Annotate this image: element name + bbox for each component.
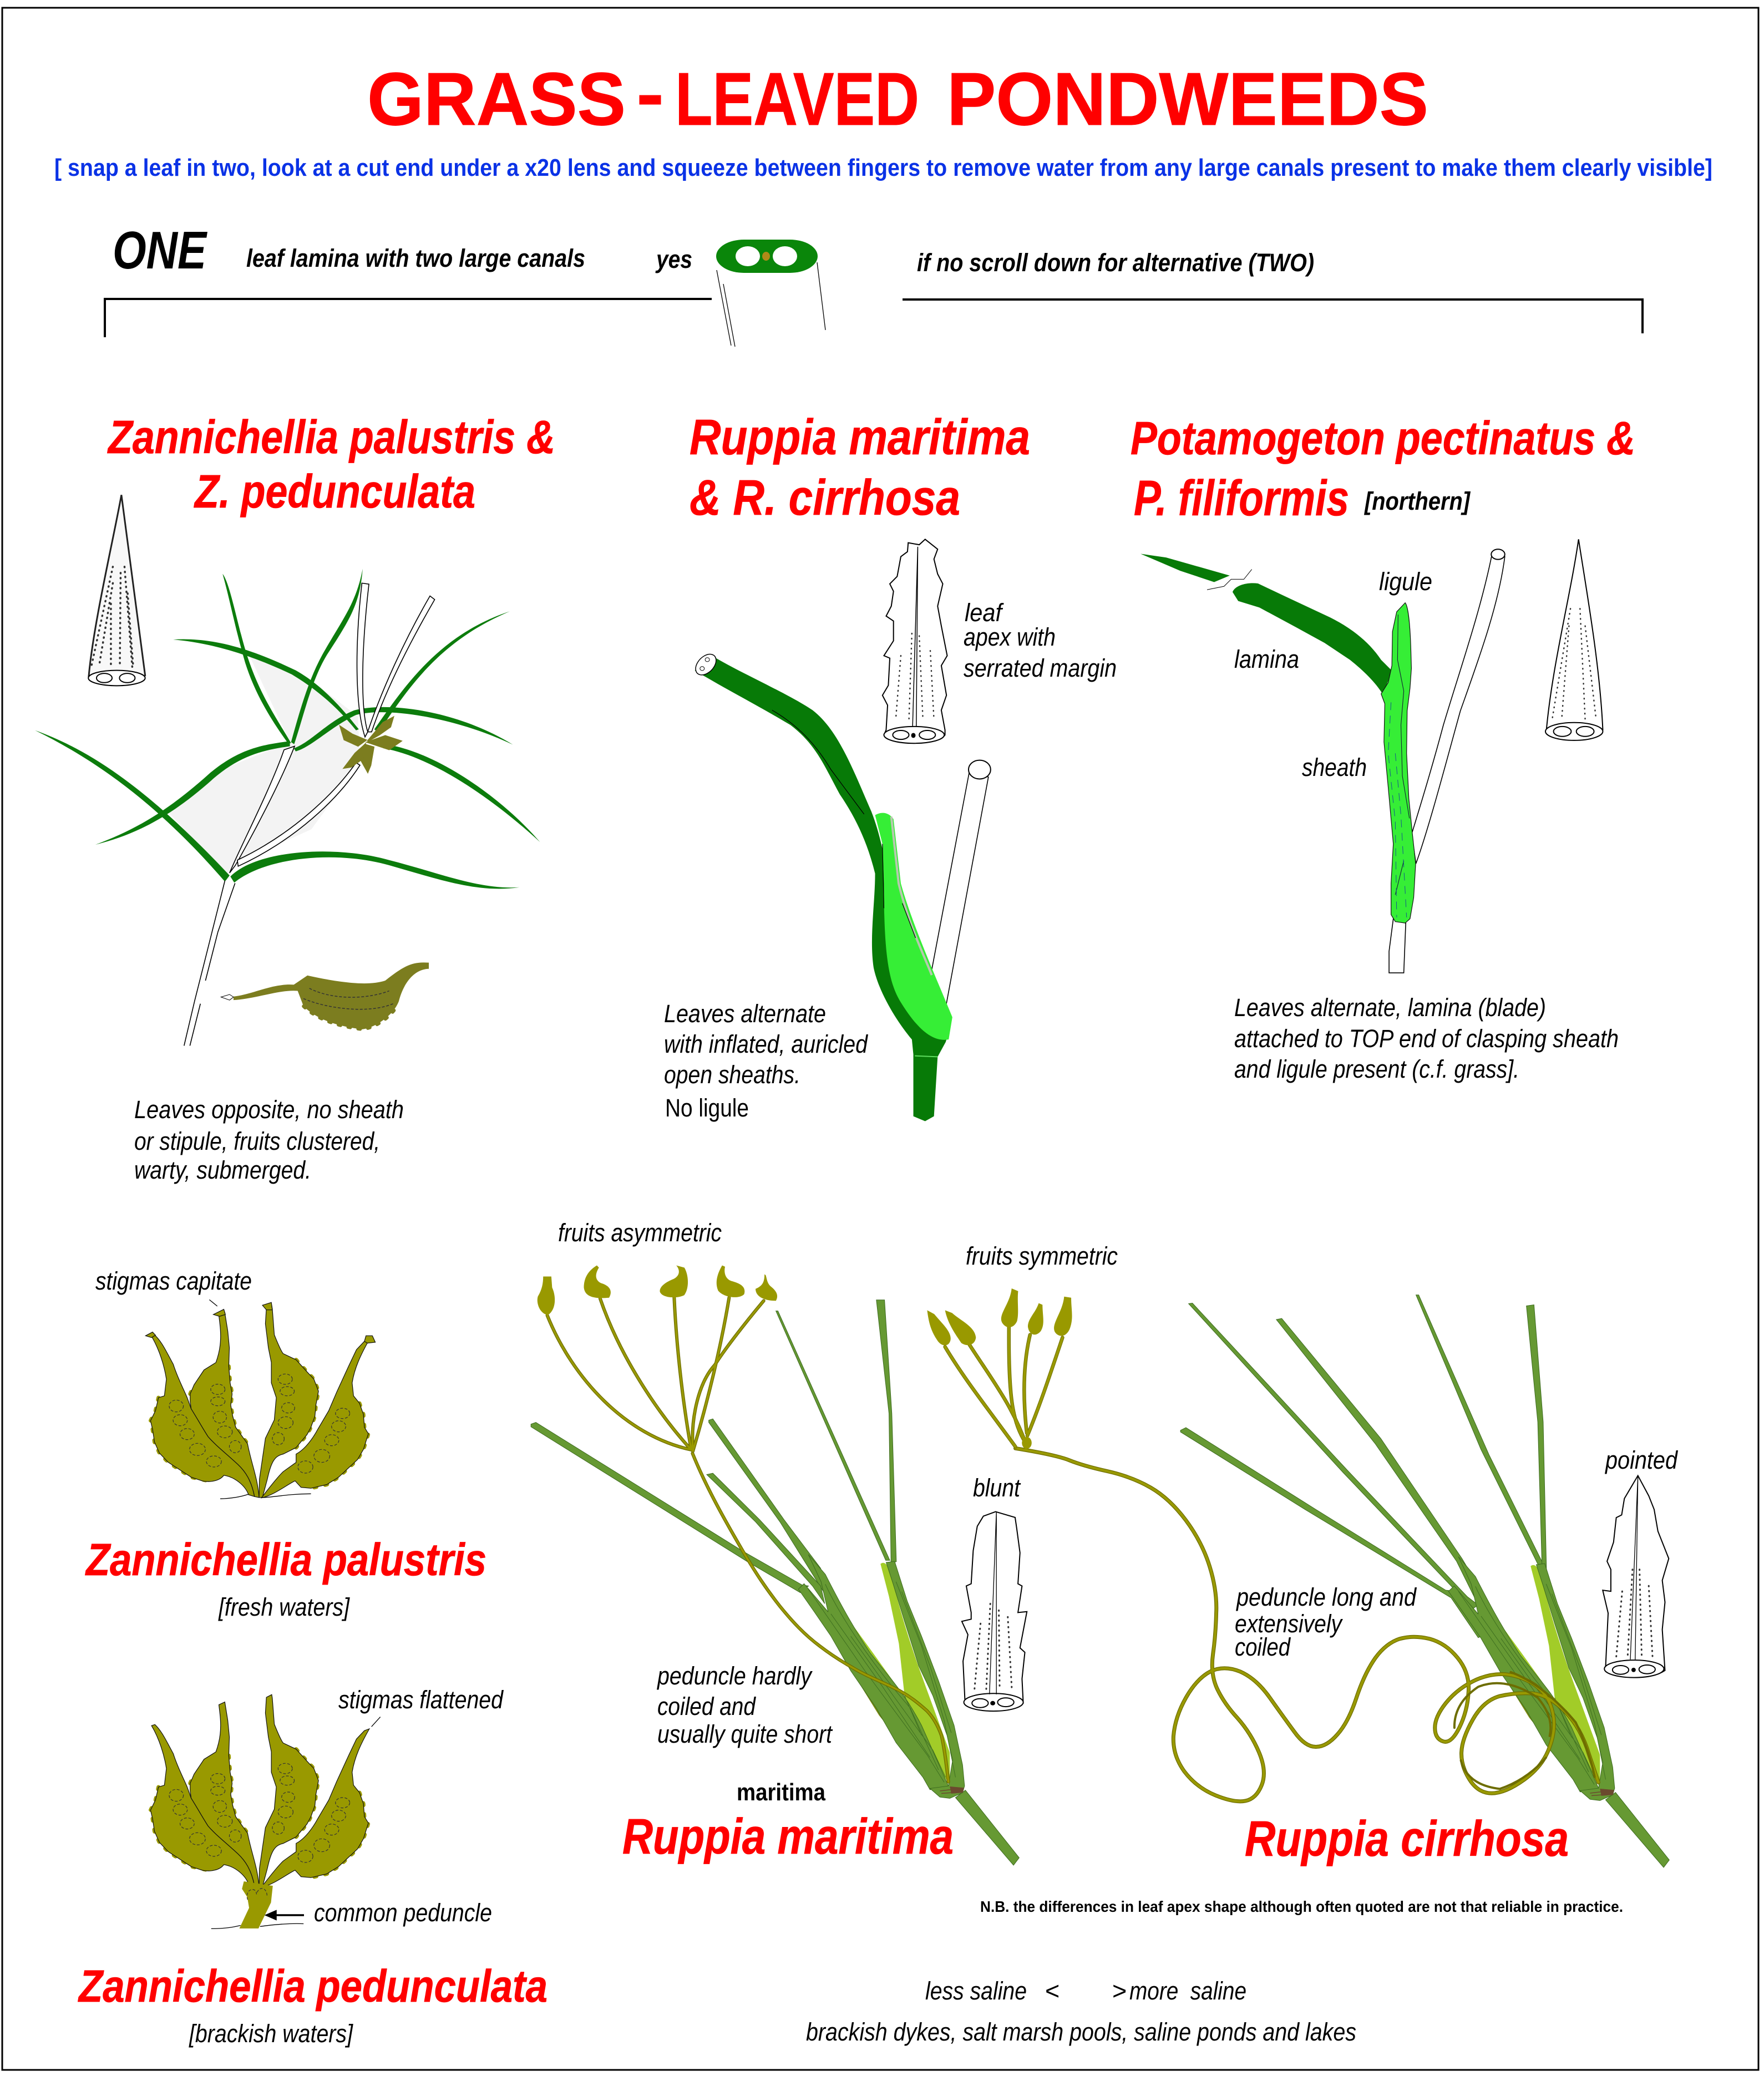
symmetric fruit stalks bbox=[945, 1327, 1062, 1449]
label: stigmas flattened: stigmas flattened bbox=[338, 1686, 504, 1714]
heading: Ruppia: Ruppia maritima bbox=[690, 410, 1030, 465]
heading: Zannichellia: Zannichellia palustris & bbox=[107, 411, 555, 463]
labels: Potamogeton parts: lamina bbox=[1234, 645, 1299, 673]
heading: Zannichellia bbox=[107, 411, 555, 517]
panel: Zannichellia plant drawing bbox=[35, 495, 540, 1045]
key step ONE: ONE bbox=[113, 221, 207, 280]
green leaves bbox=[35, 569, 540, 889]
panel: Ruppia maritima plant bbox=[531, 1266, 1027, 1865]
sheath margin bbox=[891, 816, 932, 975]
species name: Ruppia cirrhosa: Ruppia cirrhosa bbox=[1245, 1811, 1569, 1867]
collar bbox=[915, 1056, 937, 1057]
icon: pointed leaf apex on Potamogeton bbox=[1545, 539, 1603, 740]
text: Potamogeton description: Leaves alternate, lamina (blade) bbox=[1234, 993, 1546, 1022]
icon: leaf cross-section with two canals bbox=[716, 240, 825, 347]
labels: Potamogeton parts: sheath bbox=[1302, 753, 1367, 781]
species name: Zannichellia pedunculata: Zannichellia pedunculata bbox=[78, 1961, 548, 2012]
symmetric fruits bbox=[927, 1288, 1072, 1346]
habitat: brackish waters: [brackish waters] bbox=[189, 2019, 353, 2048]
species name: Ruppia maritima: Ruppia maritima bbox=[622, 1809, 954, 1865]
panel: Ruppia cirrhosa leaves bbox=[1180, 1295, 1547, 1638]
heading: Zannichellia: Z. pedunculata bbox=[194, 465, 475, 517]
title: LEAVED bbox=[675, 57, 919, 141]
lamina bbox=[1233, 583, 1391, 694]
text: Ruppia description: Leaves alternate bbox=[664, 999, 826, 1028]
stems bbox=[184, 583, 435, 1045]
text: Zannichellia description: or stipule, fruits clustered, bbox=[134, 1127, 380, 1155]
text: Ruppia description bbox=[664, 999, 869, 1122]
fruit cluster: Z. pedunculata bbox=[150, 1694, 381, 1928]
heading: Ruppia bbox=[690, 410, 1030, 526]
panel: Ruppia sheath drawing bbox=[692, 539, 991, 1121]
asymmetric fruits bbox=[538, 1266, 777, 1315]
key step ONE: if no scroll down for alternative (TWO) bbox=[917, 248, 1314, 277]
text: peduncle long and coiled: coiled bbox=[1235, 1633, 1291, 1661]
text: Potamogeton description: attached to TOP end of clasping sheath bbox=[1234, 1024, 1619, 1053]
label: leaf apex with serrated margin: apex with bbox=[964, 623, 1056, 651]
bracket left bbox=[105, 299, 712, 337]
label: fruits symmetric: fruits symmetric bbox=[966, 1242, 1118, 1270]
labels: Potamogeton parts: ligule bbox=[1379, 567, 1432, 596]
salinity scale: < bbox=[1045, 1977, 1060, 2005]
sheath veins bbox=[1395, 615, 1410, 895]
label: fruits asymmetric: fruits asymmetric bbox=[558, 1219, 722, 1247]
arrow: common peduncle bbox=[267, 1911, 304, 1919]
text: peduncle hardly coiled: coiled and bbox=[657, 1692, 757, 1720]
bracket right bbox=[903, 300, 1643, 333]
title bbox=[367, 57, 1428, 141]
icon: blunt leaf apex bbox=[962, 1512, 1027, 1711]
salinity scale bbox=[925, 1977, 1246, 2005]
sheath bbox=[1381, 603, 1416, 923]
key step ONE: yes bbox=[655, 245, 692, 273]
text: peduncle long and coiled: extensively bbox=[1235, 1610, 1343, 1638]
peduncle and fruit stalks bbox=[548, 1298, 949, 1782]
salinity scale: > bbox=[1112, 1977, 1127, 2005]
torn leaf mark bbox=[1207, 570, 1252, 590]
text: peduncle hardly coiled: usually quite short bbox=[657, 1720, 833, 1748]
leaf tip bbox=[1140, 554, 1230, 582]
midrib lines bbox=[772, 710, 915, 938]
panel: Ruppia cirrhosa coiled peduncle and fruits bbox=[927, 1288, 1669, 1801]
labels: Potamogeton parts bbox=[1234, 567, 1432, 781]
heading: Potamogeton: [northern] bbox=[1363, 487, 1471, 515]
text: peduncle long and coiled bbox=[1235, 1583, 1417, 1661]
habitat: fresh waters: [fresh waters] bbox=[218, 1593, 350, 1621]
light green sheath bbox=[875, 813, 952, 1040]
label: leaf apex with serrated margin: leaf bbox=[965, 598, 1004, 627]
species name: Zannichellia palustris: Zannichellia palustris bbox=[85, 1535, 486, 1585]
icon: serrated leaf apex bbox=[883, 539, 947, 743]
key step ONE: leaf lamina with two large canals bbox=[246, 244, 585, 272]
small label: maritima: maritima bbox=[737, 1779, 825, 1806]
icon: pointed leaf apex bbox=[1603, 1476, 1669, 1678]
text: peduncle long and coiled: peduncle long and bbox=[1235, 1583, 1417, 1611]
text: peduncle hardly coiled bbox=[656, 1662, 833, 1748]
dark green lamina and sheath bbox=[695, 654, 950, 1121]
salinity scale: more saline bbox=[1129, 1977, 1246, 2005]
coiled peduncle bbox=[1016, 1448, 1598, 1801]
icon: leaf apex bbox=[88, 495, 145, 686]
text: Zannichellia description: warty, submerged. bbox=[134, 1156, 311, 1184]
text: Zannichellia description bbox=[134, 1095, 404, 1184]
sheath bbox=[798, 1555, 1019, 1865]
fruit cluster: Z. palustris bbox=[145, 1300, 376, 1499]
title: GRASS bbox=[367, 57, 626, 141]
salinity scale: less saline bbox=[925, 1977, 1027, 2005]
text: Ruppia description: open sheaths. bbox=[664, 1060, 800, 1089]
enlarged fruit bbox=[221, 962, 429, 1029]
heading: Ruppia: & R. cirrhosa bbox=[690, 470, 960, 526]
heading: Potamogeton: P. filiformis bbox=[1134, 471, 1349, 526]
label: leaf apex with serrated margin: serrated margin bbox=[964, 654, 1117, 682]
label: common peduncle: common peduncle bbox=[314, 1899, 492, 1927]
text: Potamogeton description bbox=[1234, 993, 1619, 1083]
dashed veins bbox=[1388, 702, 1407, 917]
text: Potamogeton description: and ligule present (c.f. grass]. bbox=[1234, 1055, 1519, 1083]
panel: Potamogeton drawing bbox=[1140, 549, 1505, 973]
text: Ruppia description: with inflated, auricled bbox=[664, 1030, 869, 1058]
heading: Potamogeton: Potamogeton pectinatus & bbox=[1131, 412, 1635, 464]
key step ONE bbox=[113, 221, 1314, 280]
label: pointed: pointed bbox=[1604, 1446, 1679, 1474]
label: leaf apex with serrated margin bbox=[964, 598, 1117, 682]
note: N.B. the differences in leaf apex shape although often quoted are not that reliable in practice. bbox=[980, 1898, 1623, 1915]
label: blunt: blunt bbox=[973, 1474, 1021, 1502]
white flowering stem bbox=[1389, 549, 1505, 973]
text: Zannichellia description: Leaves opposite, no sheath bbox=[134, 1095, 404, 1124]
leaves bbox=[531, 1300, 896, 1603]
Ruppia cirrhosa sheath bbox=[1448, 1557, 1669, 1867]
white flowering stem bbox=[930, 760, 991, 1007]
title: PONDWEEDS bbox=[947, 57, 1428, 141]
text: Ruppia description: No ligule bbox=[665, 1094, 749, 1122]
lamina cut end bbox=[692, 652, 720, 677]
label: stigmas capitate: stigmas capitate bbox=[95, 1267, 252, 1295]
shaded web between leaves bbox=[168, 655, 360, 875]
fruit cluster small bbox=[341, 718, 401, 772]
text: peduncle hardly coiled: peduncle hardly bbox=[656, 1662, 813, 1690]
habitat line: brackish dykes, salt marsh pools, saline ponds and lakes bbox=[806, 2018, 1356, 2046]
heading: Potamogeton bbox=[1131, 412, 1635, 526]
